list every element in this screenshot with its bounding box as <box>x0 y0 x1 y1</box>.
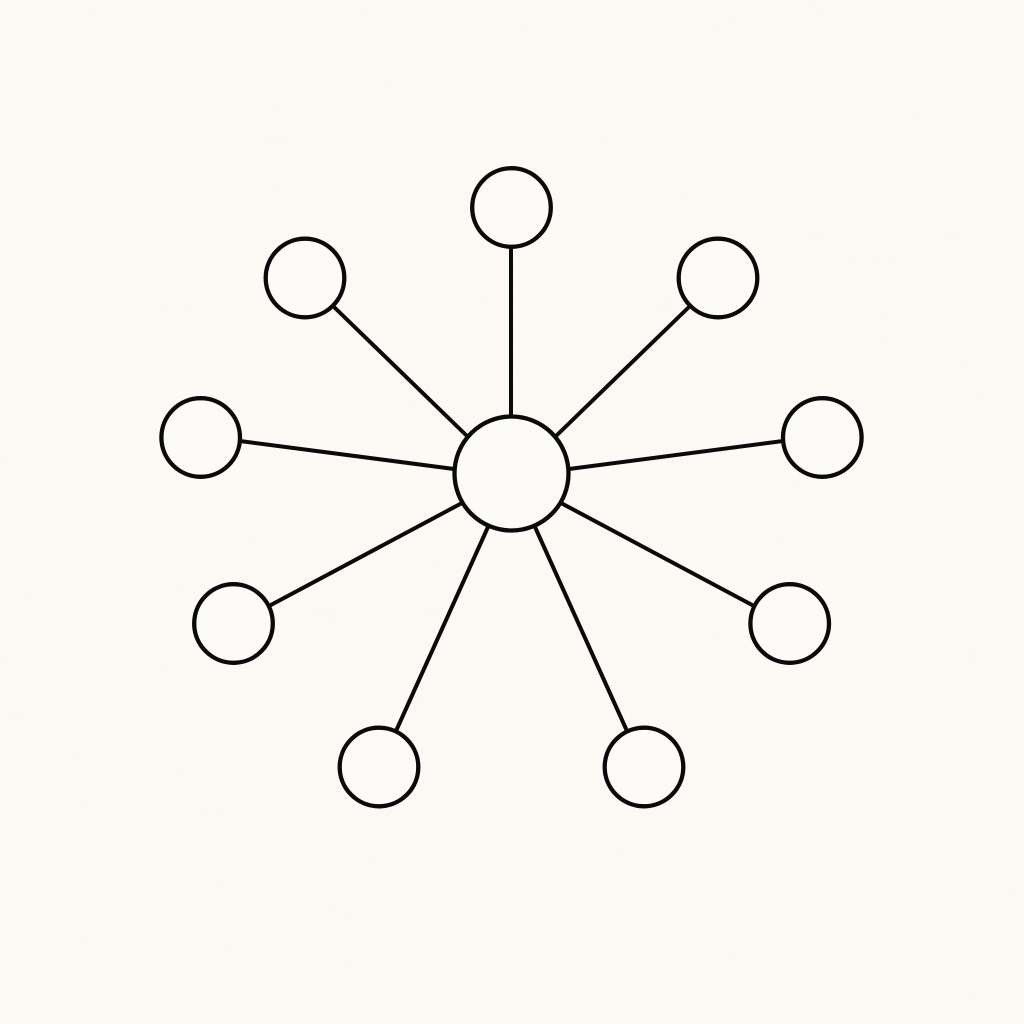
spoke: right <box>569 441 783 469</box>
node: bottom left <box>340 728 418 806</box>
spoke: upper left <box>333 306 467 436</box>
node: left <box>161 398 240 477</box>
node: lower left <box>194 584 273 663</box>
spoke: left <box>240 441 454 469</box>
spoke: upper right <box>556 306 690 436</box>
spoke: bottom left <box>396 527 488 731</box>
spoke: bottom right <box>535 527 627 731</box>
node: right <box>783 398 862 477</box>
node: upper left <box>266 239 344 317</box>
spoke: lower right <box>561 503 754 606</box>
spoke: lower left <box>269 503 462 606</box>
node: bottom right <box>605 728 683 806</box>
node: top <box>472 168 551 247</box>
node: lower right <box>750 584 829 663</box>
spoke: top <box>509 247 513 416</box>
central hub circle <box>454 416 568 530</box>
node: upper right <box>679 239 757 317</box>
